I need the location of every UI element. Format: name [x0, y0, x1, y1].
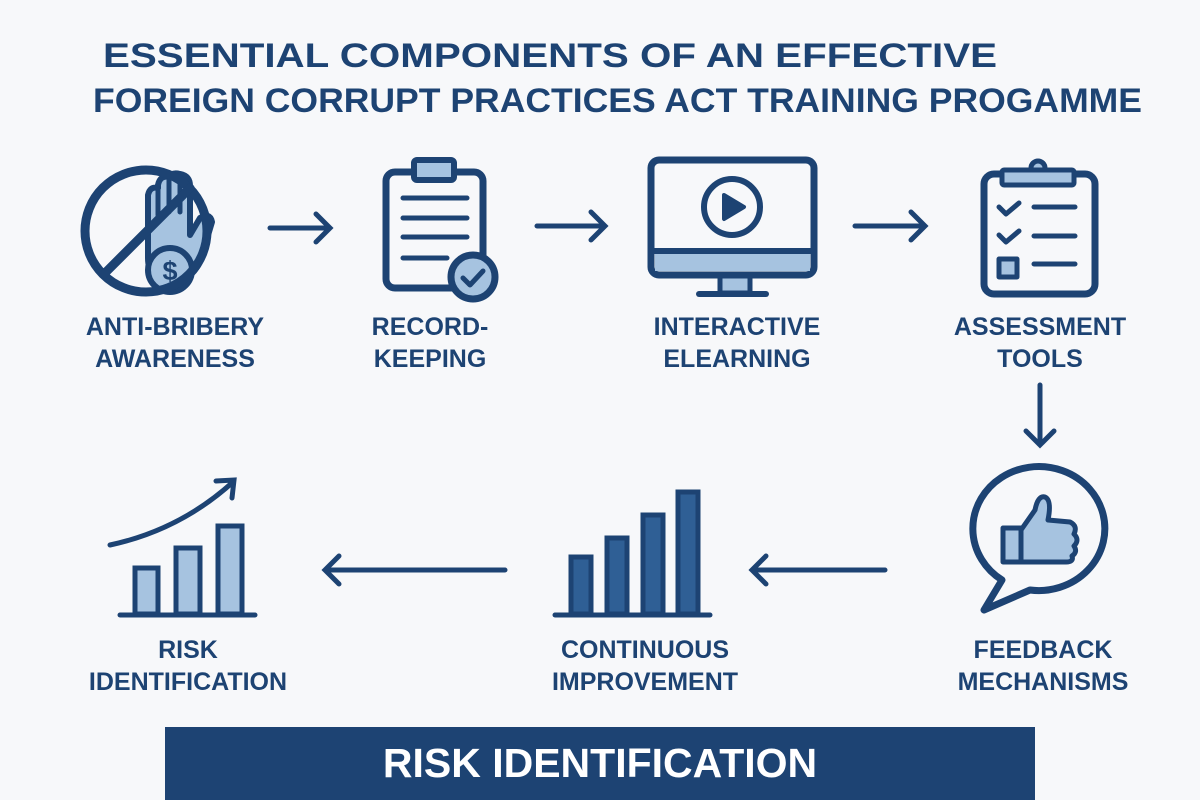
icon: assessment clipboard [984, 161, 1095, 294]
labels: bottom row: MECHANISMS [958, 668, 1128, 696]
banner [165, 727, 1035, 800]
labels: bottom row: IDENTIFICATION [89, 668, 287, 696]
icon: risk chart [110, 480, 255, 615]
labels: top row: KEEPING [374, 345, 486, 373]
labels: top row: ELEARNING [663, 345, 811, 373]
labels: top row: ASSESSMENT [954, 313, 1126, 341]
arrow left 2 [325, 556, 505, 584]
labels: top row: TOOLS [997, 345, 1083, 373]
title: FOREIGN CORRUPT PRACTICES ACT TRAINING PROGAMME [93, 82, 1142, 120]
icon: anti-bribery: $ [162, 256, 178, 286]
labels: top row: RECORD- [372, 313, 488, 341]
arrow 1 [270, 214, 330, 242]
labels: top row: ANTI-BRIBERY [86, 313, 264, 341]
icon: monitor [651, 160, 814, 294]
labels: bottom row: RISK [158, 636, 218, 664]
icon: record-keeping clipboard [386, 160, 495, 299]
labels: top row [86, 313, 1126, 373]
labels: bottom row: IMPROVEMENT [552, 668, 738, 696]
icon: continuous improvement chart [555, 492, 710, 615]
banner: RISK IDENTIFICATION [383, 740, 817, 786]
icon: anti-bribery [85, 170, 212, 292]
arrow down [1026, 385, 1054, 445]
labels: top row: AWARENESS [95, 345, 255, 373]
labels: top row: INTERACTIVE [654, 313, 820, 341]
labels: bottom row [89, 636, 1128, 696]
title [93, 37, 1142, 120]
arrow 3 [855, 212, 925, 240]
icon: feedback bubble [973, 467, 1105, 610]
arrow left 1 [752, 556, 885, 584]
title: ESSENTIAL COMPONENTS OF AN EFFECTIVE [103, 37, 997, 75]
labels: bottom row: FEEDBACK [974, 636, 1112, 664]
labels: bottom row: CONTINUOUS [561, 636, 729, 664]
arrow 2 [537, 212, 605, 240]
